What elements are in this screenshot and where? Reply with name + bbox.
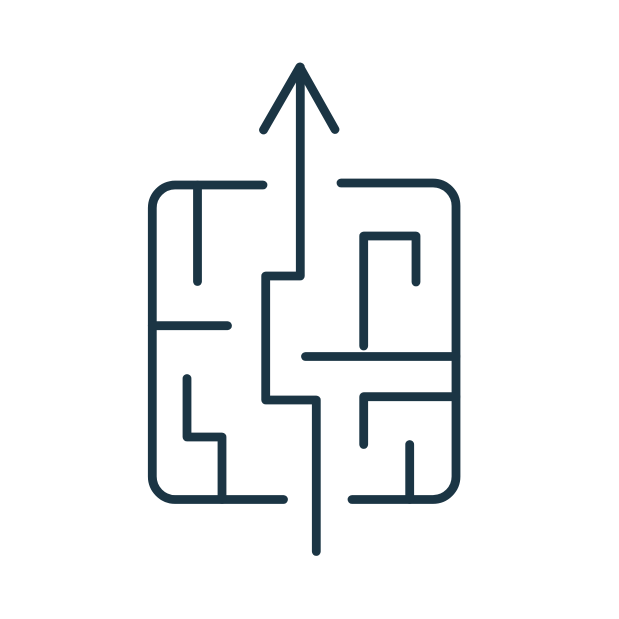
lower right wall xyxy=(364,397,456,444)
maze outer wall left xyxy=(152,185,284,500)
upper right hook wall xyxy=(364,236,416,346)
middle left inner wall xyxy=(152,321,228,330)
middle right horizontal wall xyxy=(306,352,456,361)
maze outer wall right xyxy=(341,183,456,500)
arrow path through maze xyxy=(264,67,335,552)
lower right short wall xyxy=(405,444,414,500)
upper left inner wall xyxy=(193,185,202,282)
lower left stepped wall xyxy=(187,378,222,500)
